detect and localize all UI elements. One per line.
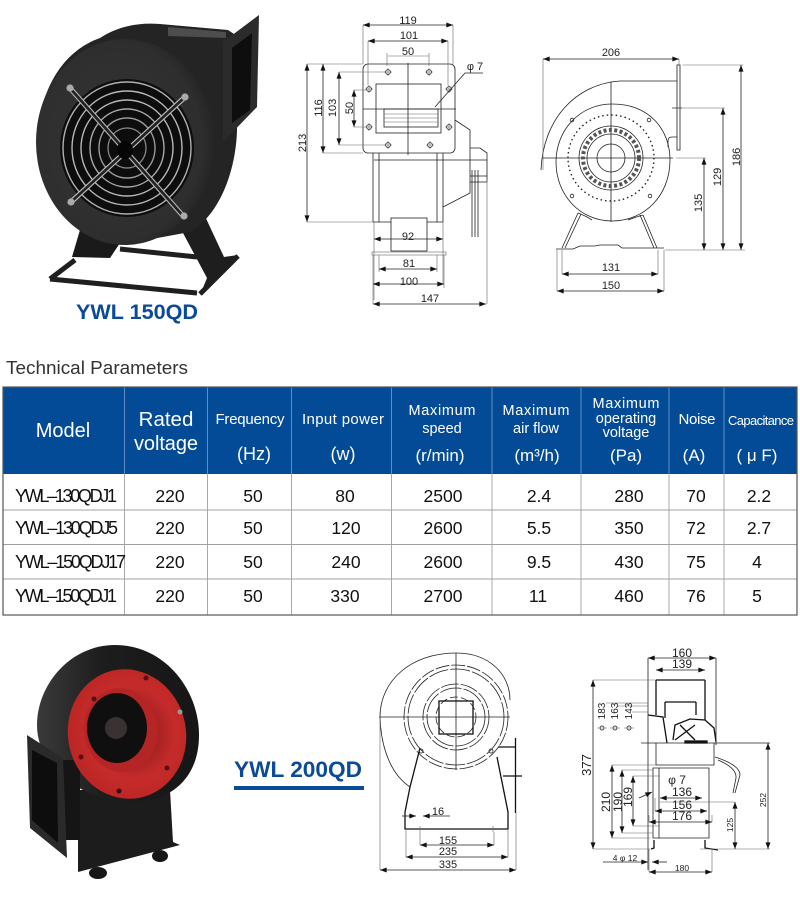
table row: YWL-130QDJ5: [15, 518, 771, 538]
heading: YWL 200QD: YWL 200QD: [234, 757, 362, 782]
product photo: YWL 200QD blower: [27, 645, 199, 879]
table row: YWL-130QDJ1: [15, 486, 771, 506]
dimension drawing: 150QD front view: 119: [399, 15, 417, 27]
table row: YWL-130QDJ5: 2600: [424, 518, 463, 538]
table grid: [3, 387, 797, 615]
dimension drawing: 200QD side view: 16: [432, 806, 444, 818]
dimension drawing: 150QD front view: 147: [421, 293, 439, 305]
dimension drawing: 200QD side view: [379, 653, 522, 871]
dimension drawing: 150QD front view: 116: [313, 99, 325, 117]
dimension drawing: 150QD front view: 100: [400, 276, 418, 288]
table row: YWL-150QDJ17: 75: [686, 552, 706, 572]
dimension drawing: 200QD side view: 155: [439, 835, 457, 847]
table header labels: (r/min): [415, 446, 465, 465]
dimension drawing: 150QD side view: 206: [602, 47, 620, 59]
table row: YWL-150QDJ1: YWL–150QDJ1: [15, 586, 117, 606]
table header labels: voltage: [134, 433, 198, 455]
dimension drawing: 150QD side view: 129: [712, 168, 724, 186]
table row: YWL-130QDJ5: 120: [331, 518, 361, 538]
table row: YWL-150QDJ17: 430: [614, 552, 644, 572]
dimension drawing: 200QD front view: 143: [624, 702, 635, 719]
dimension drawing: 200QD front view: 160: [672, 646, 692, 660]
table header labels: ( μ F): [737, 446, 777, 465]
dimension drawing: 200QD front view: 125: [725, 818, 735, 832]
table row: YWL-150QDJ1: 50: [243, 586, 263, 606]
table row: YWL-130QDJ5: 220: [155, 518, 185, 538]
table row: YWL-150QDJ17: 240: [331, 552, 361, 572]
table header labels: Maximum: [592, 396, 660, 412]
dimension drawing: 200QD front view: 210: [599, 792, 613, 812]
table header labels: Maximum: [408, 403, 476, 419]
table row: YWL-130QDJ1: 70: [686, 486, 706, 506]
table header labels: Input power: [302, 411, 384, 428]
dimension drawing: 200QD side view: 335: [439, 859, 457, 871]
table header labels: (w): [330, 444, 356, 464]
dimension drawing: 200QD front view: [579, 646, 770, 873]
table row: YWL-150QDJ1: 76: [686, 586, 706, 606]
table row: YWL-150QDJ1: 330: [330, 586, 360, 606]
dimension drawing: 150QD side view: 135: [693, 194, 705, 212]
table header labels: (Pa): [610, 446, 642, 465]
table header band: [3, 387, 797, 474]
dimension drawing: 150QD side view: 186: [731, 148, 743, 166]
table row: YWL-130QDJ5: 5.5: [527, 518, 551, 538]
fan outlet flange: [223, 15, 259, 142]
table row: YWL-150QDJ1: 5: [752, 586, 762, 606]
table row: YWL-130QDJ5: 350: [614, 518, 644, 538]
table row: YWL-130QDJ5: 50: [243, 518, 263, 538]
table row: YWL-130QDJ1: YWL–130QDJ1: [15, 486, 117, 506]
table row: YWL-130QDJ1: 50: [243, 486, 263, 506]
dimension drawing: 150QD front view: φ 7: [467, 61, 483, 73]
dimension drawing: 150QD front view: 81: [403, 258, 415, 270]
table row: YWL-130QDJ1: 2.4: [527, 486, 551, 506]
table header labels: (m³/h): [514, 446, 560, 465]
dimension drawing: 200QD front view: 163: [610, 702, 621, 719]
table header labels: Model: [36, 420, 90, 442]
fan guard grille: [60, 79, 194, 220]
table header labels: air flow: [513, 421, 559, 437]
table row: YWL-130QDJ5: 2.7: [747, 518, 771, 538]
table row: YWL-150QDJ1: 2700: [424, 586, 463, 606]
dimension drawing: 150QD side view: 131: [602, 262, 620, 274]
fan stand: [50, 212, 238, 295]
table row: YWL-150QDJ17: 50: [243, 552, 263, 572]
dimension drawing: 200QD front view: 190: [611, 792, 625, 812]
table row: YWL-150QDJ1: 11: [529, 586, 547, 606]
table row: YWL-130QDJ1: 2500: [424, 486, 463, 506]
dimension drawing: 150QD front view: 103: [327, 99, 339, 117]
table header labels: voltage: [603, 425, 649, 441]
heading: Technical Parameters: Technical Parameters: [6, 357, 188, 378]
table header labels: Rated: [139, 408, 193, 431]
table row: YWL-130QDJ1: 280: [614, 486, 644, 506]
dimension drawing: 150QD front view: 101: [400, 30, 418, 42]
dimension drawing: 150QD front view: 50: [402, 46, 414, 58]
table row: YWL-130QDJ1: 2.2: [747, 486, 771, 506]
rubber feet: [89, 850, 168, 879]
table row: YWL-130QDJ1: 80: [335, 486, 355, 506]
table row: YWL-150QDJ17: [15, 552, 762, 572]
table header labels: (Hz): [237, 444, 271, 464]
table header labels: Maximum: [502, 403, 570, 419]
table row: YWL-130QDJ5: YWL–130QDJ5: [15, 518, 118, 538]
fan housing: [36, 24, 237, 245]
dimension drawing: 200QD front view: 377: [579, 754, 594, 776]
dimension drawing: 200QD front view: 169: [621, 787, 635, 807]
dimension drawing: 150QD front view: 92: [402, 231, 414, 243]
dimension drawing: 150QD front view: [297, 15, 487, 305]
dimension drawing: 200QD front view: 176: [672, 809, 692, 823]
dimension drawing: 200QD front view: φ 7: [668, 773, 686, 787]
table row: YWL-150QDJ17: 220: [155, 552, 185, 572]
dimension drawing: 200QD front view: 183: [597, 702, 608, 719]
table row: YWL-130QDJ5: 72: [686, 518, 706, 538]
table header labels: Capacitance: [728, 413, 794, 428]
blower stand: [78, 790, 180, 872]
table row: YWL-150QDJ1: 460: [614, 586, 644, 606]
product photo: YWL 150QD blower: [36, 15, 259, 295]
table header labels: speed: [422, 421, 462, 437]
dimension drawing: 150QD front view: 50: [344, 102, 356, 114]
table row: YWL-150QDJ17: 9.5: [527, 552, 551, 572]
dimension drawing: 200QD front view: 136: [672, 785, 692, 799]
table header labels: (A): [683, 446, 705, 465]
dimension drawing: 200QD front view: 139: [672, 657, 692, 671]
dimension drawing: 150QD side view: [541, 47, 745, 292]
table header labels: [36, 396, 794, 465]
table row: YWL-130QDJ1: 220: [155, 486, 185, 506]
dimension drawing: 200QD front view: 180: [675, 863, 689, 873]
table header labels: Frequency: [216, 411, 285, 428]
dimension drawing: 200QD front view: 4 φ 12: [613, 853, 637, 863]
blower housing: [37, 645, 199, 802]
red inlet ring: [56, 658, 198, 810]
table row: YWL-150QDJ1: 220: [155, 586, 185, 606]
table header labels: Noise: [678, 411, 716, 428]
table header labels: operating: [596, 411, 656, 427]
dimension drawing: 150QD side view: 150: [602, 280, 620, 292]
table row: YWL-150QDJ17: 2600: [424, 552, 463, 572]
blower outlet flange: [27, 735, 80, 858]
dimension drawing: 200QD front view: 156: [672, 798, 692, 812]
table row: YWL-150QDJ1: [15, 586, 762, 606]
table: technical parameters: [3, 387, 797, 615]
table row: YWL-150QDJ17: YWL–150QDJ17: [15, 552, 126, 572]
dimension drawing: 200QD side view: 235: [439, 846, 457, 858]
heading: YWL 150QD: YWL 150QD: [76, 301, 198, 324]
dimension drawing: 150QD front view: 213: [297, 134, 309, 152]
table row: YWL-150QDJ17: 4: [752, 552, 762, 572]
dimension drawing: 200QD front view: 252: [758, 793, 768, 807]
